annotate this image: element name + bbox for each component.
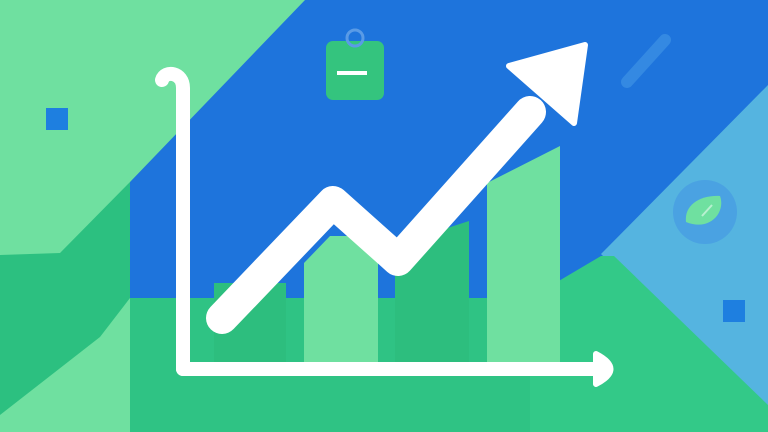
panel: light blue right triangle xyxy=(601,85,768,420)
panel: left dark green band xyxy=(0,182,130,415)
icon: leaf badge xyxy=(673,180,737,244)
icon: small blue square left xyxy=(46,108,68,130)
panel: bottom green band xyxy=(130,298,768,432)
bar chart xyxy=(214,146,560,368)
trend arrow xyxy=(222,45,585,318)
panel: right green mountain xyxy=(530,256,768,432)
icon: blurred pill xyxy=(627,40,665,82)
icon: clipboard xyxy=(326,30,384,100)
panel: left light green xyxy=(0,0,305,432)
axes xyxy=(162,74,610,384)
icon: small blue square right xyxy=(723,300,745,322)
